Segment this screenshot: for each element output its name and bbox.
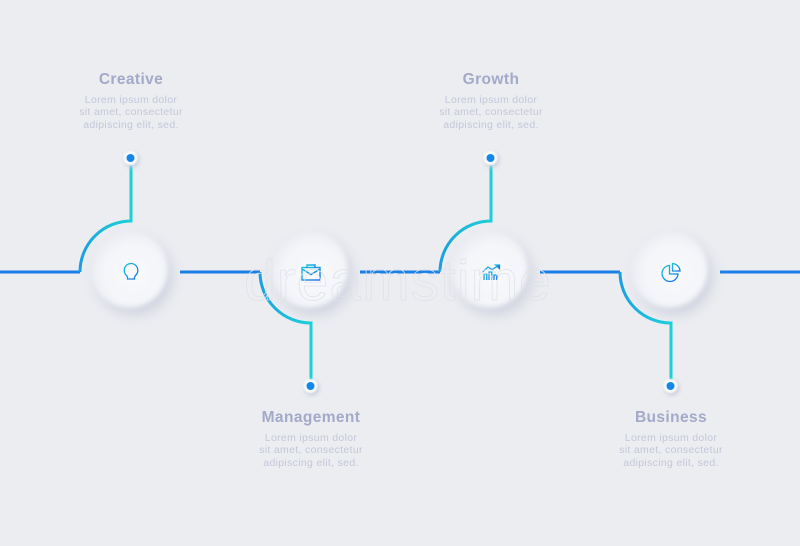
text block: growth: Lorem ipsum dolor [445,94,537,106]
circle: creative [90,230,168,308]
text block: growth: Growth [463,71,519,88]
watermark: dreamstime [244,249,552,313]
text block: growth [439,71,543,131]
shadow: management circle [277,239,351,313]
marker dot: growth [484,151,500,168]
marker dot: management [304,379,320,396]
text block: creative: sit amet, consectetur [79,106,183,118]
connector line: segment 1 [0,270,80,274]
shadow: business circle [637,239,711,313]
branch: creative [80,160,131,272]
text block: management: sit amet, consectetur [259,444,363,456]
text block: creative: adipiscing elit, sed. [83,119,179,131]
text block: creative: Lorem ipsum dolor [85,94,177,106]
circle: business [630,230,708,308]
circle: management [270,230,348,308]
icon: growth chart [482,265,500,280]
text block: business: Business [635,409,707,426]
text block: management: Lorem ipsum dolor [265,432,357,444]
shadow: growth circle [457,239,531,313]
marker dot: business [664,379,680,396]
branch: business [620,272,671,384]
connector line: segment 3 [360,270,440,274]
icon: light bulb [124,263,138,282]
branch: growth [440,160,491,272]
connector line: segment 4 [540,270,620,274]
text block: business: Lorem ipsum dolor [625,432,717,444]
icon: briefcase [302,265,320,280]
circle: growth [450,230,528,308]
branch: management [260,272,311,384]
text block: creative: Creative [99,71,163,88]
connector line: segment 2 [180,270,260,274]
text block: growth: sit amet, consectetur [439,106,543,118]
text block: business [619,409,723,469]
text block: growth: adipiscing elit, sed. [443,119,539,131]
text block: business: sit amet, consectetur [619,444,723,456]
text block: creative [79,71,183,131]
icon: pie chart [662,264,680,281]
connector line: segment 5 [720,270,800,274]
shadow: creative circle [97,239,171,313]
text block: management: adipiscing elit, sed. [263,457,359,469]
text block: business: adipiscing elit, sed. [623,457,719,469]
text block: management: Management [262,409,360,426]
text block: management [259,409,363,469]
marker dot: creative [124,151,140,168]
